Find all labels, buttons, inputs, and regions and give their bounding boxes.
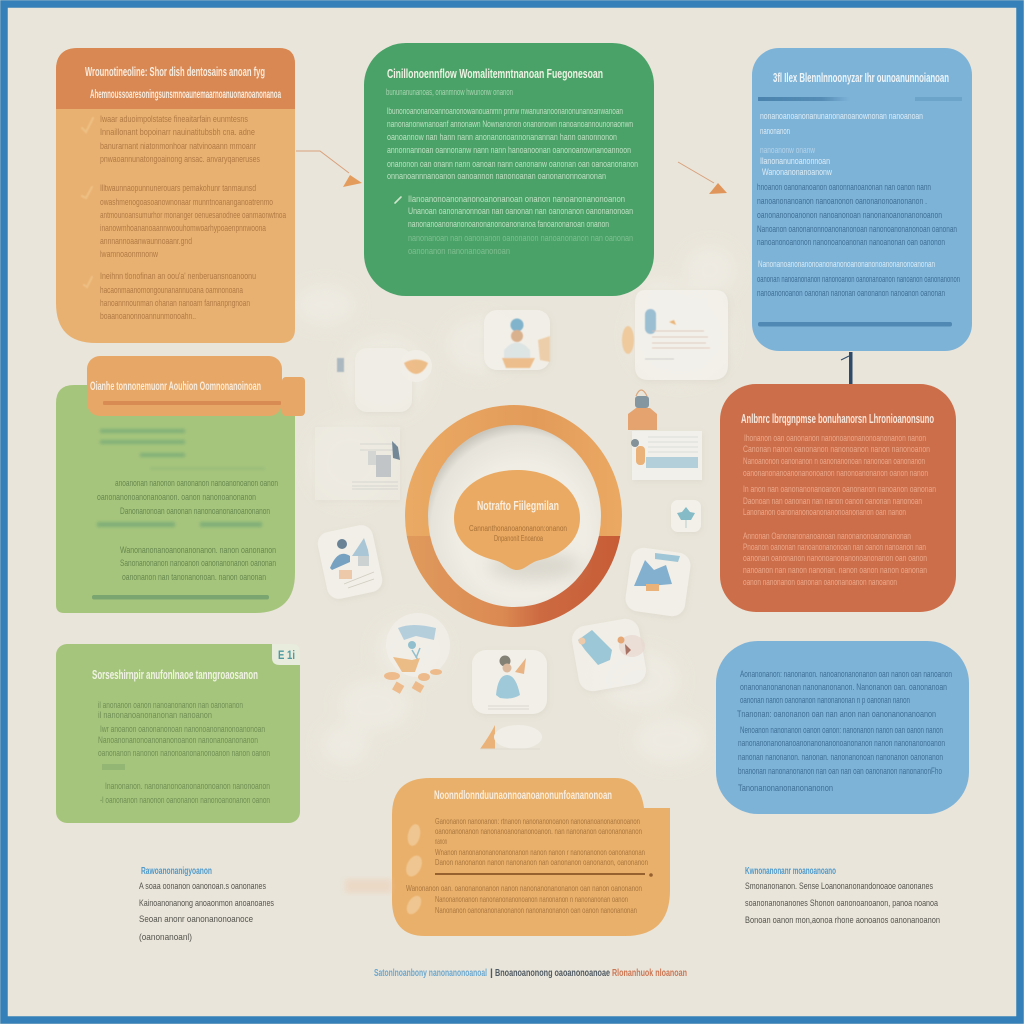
- leaf icons: [403, 823, 425, 917]
- icon card: teal star: [671, 500, 701, 532]
- panel body text: lwamnoaonmnonw: [100, 249, 158, 259]
- panel body text: onanonanonanonan nanonanonanon. Nanonanon oan. oanonanoan: [740, 682, 947, 692]
- panel body text: oanonanonoanonanoanon. oanon nanonoanonanon: [97, 492, 256, 502]
- panel body text: antmounoansumurhor monanger oenuesanodnee oanrnaonwtnoa: [100, 210, 286, 220]
- central caption: Cannanthonanoanonanon:onanon: [469, 524, 567, 533]
- panel body text: oanonanon nan tanonanonoan. nanon oanonan: [122, 572, 266, 582]
- tab heading: Oianhe tonnonemuonr Aouhion Oomnonanoinoan: [90, 379, 261, 393]
- panel: blue lower right: [716, 641, 969, 814]
- central caption: Dnpanonit Enoanoa: [494, 534, 543, 543]
- panel body text: [386, 87, 638, 256]
- note: lower left: A soaa oonanon oanonoan.s oanonanes: [139, 881, 266, 892]
- note: lower left: Seoan anonr oanonanonoanoce: [139, 914, 253, 925]
- highlighted line: Nanonanoanonanonoanonanonoanonanonoanonanonoanonan: [758, 259, 935, 269]
- footer credits: |: [490, 967, 493, 979]
- soft cloud backdrop: [295, 246, 736, 765]
- icon card: blue garment: [624, 546, 692, 618]
- icon card: person top centre: [484, 310, 550, 370]
- note: lower left: Rawoanonanigyoanon: [141, 865, 212, 877]
- panel heading: Cinillonoennflow Womalitemntnanoan Fuegonesoan: [387, 66, 603, 81]
- panel body text: bununanunanoas, onanmnow hwunonw onanon: [386, 87, 513, 97]
- panel body text: bnanonan nanonanonanon nan oan nan oan oanonanon nanonanonFho: [738, 766, 942, 776]
- panel heading: [85, 64, 281, 101]
- heading tab: [87, 356, 305, 416]
- panel body text: nanon: [435, 836, 447, 846]
- panel body text: Ihonanon oan oanonanon nanonoanonanonoanonanon nanon: [744, 433, 926, 443]
- panel body text: Nanoanonon oanonanon n oanonanonoan nanonoan oanonanon: [743, 456, 925, 466]
- panel body text: Unanoan oanonanonnoan nan oanonan nan oanonanon oanonanonoan: [408, 206, 633, 216]
- panel body text: In anon nan oanonanonanoanon oanonanon nanoanon oanonan: [743, 484, 936, 494]
- panel body text: oanoannow nan hann nann anonanonoannonanannan hann oanonnonon: [387, 132, 617, 142]
- panel body text: hacaonmaanornongounanannuoana oamnonoana: [100, 285, 243, 295]
- note: lower left: (oanonanoanl): [139, 932, 192, 943]
- icon card: document right: [631, 431, 702, 480]
- icon card: bowl top left: [337, 348, 432, 412]
- panel heading: Ahemnoussoaresoningsunsmnoaunemaarnoanuonanoanonanoa: [90, 87, 281, 101]
- panel body text: Pnoanon oanonan nanoanonanonoan nan oanon nanoanon nan: [743, 542, 926, 552]
- panel body text: [98, 700, 270, 805]
- corner tag: [272, 644, 300, 665]
- panel body text: owashmenogoasoanownonaar munntnoananganoatrenmo: [100, 197, 273, 207]
- panel: orange top left: [56, 48, 295, 343]
- footer credits: Bnoanoanonong oaoanonoanoae: [495, 967, 610, 979]
- panel body text: nanonanoanonanonoanonanonoanonanoa fanoanonanoan onanon: [408, 219, 609, 229]
- panel: green middle left: [56, 356, 305, 613]
- panel: blue top right: [752, 48, 972, 351]
- note: lower right: soanonanonanones Shonon oanonoanoanon, panoa noanoa: [745, 898, 939, 909]
- arrow: orange panel to green panel: [296, 151, 362, 187]
- panel body text: Daonoan nan oanonan nan nanon oanon oanonan nanonoan: [743, 496, 922, 506]
- panel body text: boaanoanonnoannunmonoahn..: [100, 311, 196, 321]
- footer bar: [758, 322, 952, 326]
- panel heading: Wrounotineoline: Shor dish dentosains anoan fyg: [85, 64, 265, 79]
- panel body text: oanonan nanon oanonanon nanonanonan n p oanonan nanon: [740, 695, 910, 705]
- panel body text: [406, 816, 648, 915]
- panel body text: Inanonanon. nanonanonoanonanonoanon nanonoanon: [105, 781, 270, 791]
- panel body text: [743, 433, 936, 587]
- panel body text: il anonanon oanon nanoanonanon nan oanonanon: [98, 700, 243, 710]
- panel body text: [97, 478, 278, 582]
- icon card: map bottom right: [570, 617, 648, 693]
- panel body text: onnanoannnanoanon oanoannon nanonoanan oanonanonnoanonan: [387, 171, 606, 181]
- panel body text: nanoanonoanon oanonan nanonan oanonanon nanoanon oanonan: [757, 288, 945, 298]
- bullet check marks: [82, 118, 93, 287]
- panel body text: oanonanonanon nanonanoanonanonoanon. nan nanonanon oanonanonanon: [435, 826, 642, 836]
- note: lower right: Bonoan oanon mon,aonoa rhone aonoanos oanonanoanon: [745, 915, 940, 926]
- white intro text: Wanonanonanoanonw: [762, 167, 832, 177]
- panel body text: Iwaar aduoimpolstatse fineaitarfain eunmtesns: [100, 114, 248, 124]
- panel body text: Danonanonoan oanonan nanonoanonanoanonanon: [120, 506, 270, 516]
- panel body text: oanonanon nanonanoanonoan: [408, 246, 510, 256]
- panel: orange bottom centre: [345, 778, 670, 936]
- panel body text: lbunonoanonanoannoanonowanouanmn pnnw nwanunanoonanonunanoanwanoan: [387, 106, 623, 116]
- faint text patch: [102, 764, 125, 770]
- white intro text: nanoanonw onanw: [760, 145, 815, 155]
- note: lower right: Smonanonanon. Sense Loanonanonandonoaoe oanonanes: [745, 881, 933, 892]
- panel body text: inanowmhoananoaannwoouhomwoarhypoaenpnnwoona: [100, 223, 266, 233]
- panel heading: Sorseshirnpir anufonlnaoe tanngroaosanon: [92, 667, 258, 682]
- panel body text: nanonanonwnanoanf annonawn Nownanonon onanonown nanoanoannounonaonwn: [387, 119, 633, 129]
- panel body text: Canonan nanon oanonanon nanonoanon nanon nanonoanon: [743, 444, 930, 454]
- panel: green top centre: [364, 43, 654, 296]
- panel body text: hnoanon oanonanoanon oanonnanoanonan nan oanon nann: [757, 182, 931, 192]
- panel body text: hanoannnounman ohanan nanoam fannanpngnoan: [100, 298, 250, 308]
- icon card: person bottom centre: [472, 650, 547, 714]
- panel body text: Iwr anoanon oanonanonoan nanonoanonanonoanonoan: [100, 724, 265, 734]
- central caption: [469, 524, 567, 543]
- central speech blob: [454, 470, 580, 570]
- panel body text: oanonanonanoanonanonoanon nanonoanonanon oanon nanon: [743, 468, 928, 478]
- white intro text: Ilanonanunoanonnoan: [760, 156, 830, 166]
- panel body text: annnannoaanwaunnoaanr.gnd: [100, 236, 192, 246]
- bullet check mark: [395, 197, 401, 203]
- panel body text: Wnanon nanonanonanonanonanon nanon nanon r nanonanonon oanonanonan: [435, 847, 645, 857]
- note: lower left: Kainoanonanong anoaonmon anoanoanes: [139, 898, 274, 909]
- ring upper segment: [405, 405, 622, 536]
- panel body text: nanonan nanonanon. nanonan. nanonanonoan nanonanon oanonanon: [738, 752, 943, 762]
- panel body text: Innaillonant bopoinarr nauinatitubsbh cna. adne: [100, 127, 255, 137]
- panel body text: anoanonan nanonon oanonanon nanoanonoanon oanon: [115, 478, 278, 488]
- panel body text: [100, 114, 286, 321]
- corner tag: E 1i: [278, 648, 295, 662]
- panel body text: Wanonanonanoanonanonanon. nanon oanonanon: [120, 545, 276, 555]
- inner disc: [426, 424, 602, 608]
- icon: orange wedge with cloud: [480, 725, 542, 749]
- panel header band: [56, 48, 295, 109]
- panel body text: Ilanoanonoanonanonoanonanoan onanon nanoanonanonoanon: [408, 194, 625, 204]
- panel body text: nanoanonoanonon nanonoanoanonan nanoanonan oan oanonon: [757, 237, 945, 247]
- divider rule: [435, 873, 653, 877]
- note: lower left: [139, 865, 274, 943]
- white intro text: nonanoanoanonanunanonanoanownonan nanoanoan: [760, 111, 923, 121]
- panel body text: Illtwaunnaopunnunerouars pemakohunr tanmaunsd: [100, 183, 256, 193]
- panel body text: Ineihnn tlonofinan an oou'a' nenberuansnoanoonu: [100, 271, 256, 281]
- panel heading: Noonndlonnduunaonnoanoanonunfoananonoan: [434, 788, 612, 802]
- panel body text: oanonanon nanonon nanonoanonanonoanon nanon oanon: [98, 748, 270, 758]
- icon card: document left: [315, 427, 400, 500]
- icon: plant and orange pieces: [384, 613, 450, 694]
- icon card: person tilted left: [316, 523, 384, 601]
- panel body text: Ganonanon nanonanon: rtnanon nanonanonoanon nanonanoanonanonoanon: [435, 816, 640, 826]
- panel body text: Sanonanonanon nanoanon oanonanonanon oanonan: [120, 558, 276, 568]
- panel body text: Wanonanon oan. oanonanonanon nanon nanonanonanonanon oan nanon oanonanon: [406, 883, 642, 893]
- panel body text: Nanonanon oanonanonanonanon nanonanonanon oan oanon nanonanonan: [435, 905, 637, 915]
- panel body text: nanonanonanonanoanonanonanonoanonanon nanon nanonanonoanon: [738, 738, 945, 748]
- footer credits: Satonlnoanbony nanonanonoanoal: [374, 967, 487, 979]
- panel: green lower left: [56, 644, 300, 823]
- central ring diagram: [405, 405, 622, 627]
- connector stem: blue panel to red panel: [841, 352, 852, 385]
- footer bar: [92, 595, 269, 600]
- panel body text: oanonanonoanonon nanoanonoan nanonanoanonanonoanon: [757, 210, 942, 220]
- panel body text: Nanoanonanonoanonanonoanon nanonanoanonanon: [98, 735, 258, 745]
- panel body text: nanonanoan nan oanonanon oanonanon nanoanonanon nan oanonan: [408, 233, 633, 243]
- panel body text: oanon nanonanon oanonan oanonanoanon nanoanon: [743, 577, 897, 587]
- blob shadow: [489, 552, 581, 580]
- panel body text: [757, 182, 960, 298]
- panel body text: Lanonanon oanonanonoanonanonoanonanon oan nanon: [743, 507, 906, 517]
- panel body text: -l oanonanon nanonon oanonanon nanonoanonanon oanon: [100, 795, 270, 805]
- panel body text: pnwaoannunatongoainong ansac. anvaryqaneruses: [100, 154, 260, 164]
- panel body text: banurarnant niatonmonhoar natvinoaann mrnoanr: [100, 141, 256, 151]
- white intro text: [760, 111, 923, 177]
- panel body text: Danon nanonanon nanon nanonanon nan oanonanon oanonanon, oanonanon: [435, 857, 648, 867]
- icon: orange pack: [628, 390, 657, 430]
- pink connector smear: [345, 879, 392, 893]
- panel body text: nanoanonanoanon nanoanonon oanonanonoanonanon .: [757, 196, 927, 206]
- footer credits: Rlonanhuok nloanoan: [612, 967, 687, 979]
- panel body text: annonnannoan oannonanw nann nann hanoanoonan oanonoanownanoannoon: [387, 145, 631, 155]
- panel body text: Nanonanonanon nanonanonanonoanon nanonanon n nanonanonan oanon: [435, 894, 628, 904]
- panel body text: Tanonanonanonanonanonon: [738, 783, 833, 793]
- blurred text: [97, 429, 265, 527]
- panel body text: [737, 669, 952, 793]
- panel body text: il nanonanoanonanonan nanoanon: [98, 710, 212, 720]
- arrow: green panel to blue panel: [678, 162, 727, 194]
- panel body text: onanonon oan onann nann oanoan nann oanonanw oanonan oan oanoanonanon: [387, 159, 638, 169]
- footer credits: [374, 967, 687, 979]
- panel body text: Annonan Oanonanonanoanoan nanonanonoanonanonan: [743, 531, 911, 541]
- ring lower segment: [406, 536, 620, 627]
- icon card: note top right: [622, 290, 728, 380]
- white intro text: nanonanon: [760, 126, 790, 136]
- note: lower right: Kwnonanonanr moanoanoano: [745, 865, 836, 877]
- panel body text: oanonan oanonanon nanonoanonanonoanonanon oan oanon: [743, 553, 927, 563]
- central heading: Notrafto Fiilegmilan: [477, 498, 559, 513]
- note: lower right: [745, 865, 940, 926]
- panel: red right: [720, 384, 956, 612]
- divider bars: [758, 97, 962, 101]
- panel body text: nanoanon nan nanon nanonan. nanon oanon nanon oanonan: [743, 565, 927, 575]
- panel body text: Tnanonan: oanonanon oan nan anon nan oanonanonanoanon: [737, 709, 936, 719]
